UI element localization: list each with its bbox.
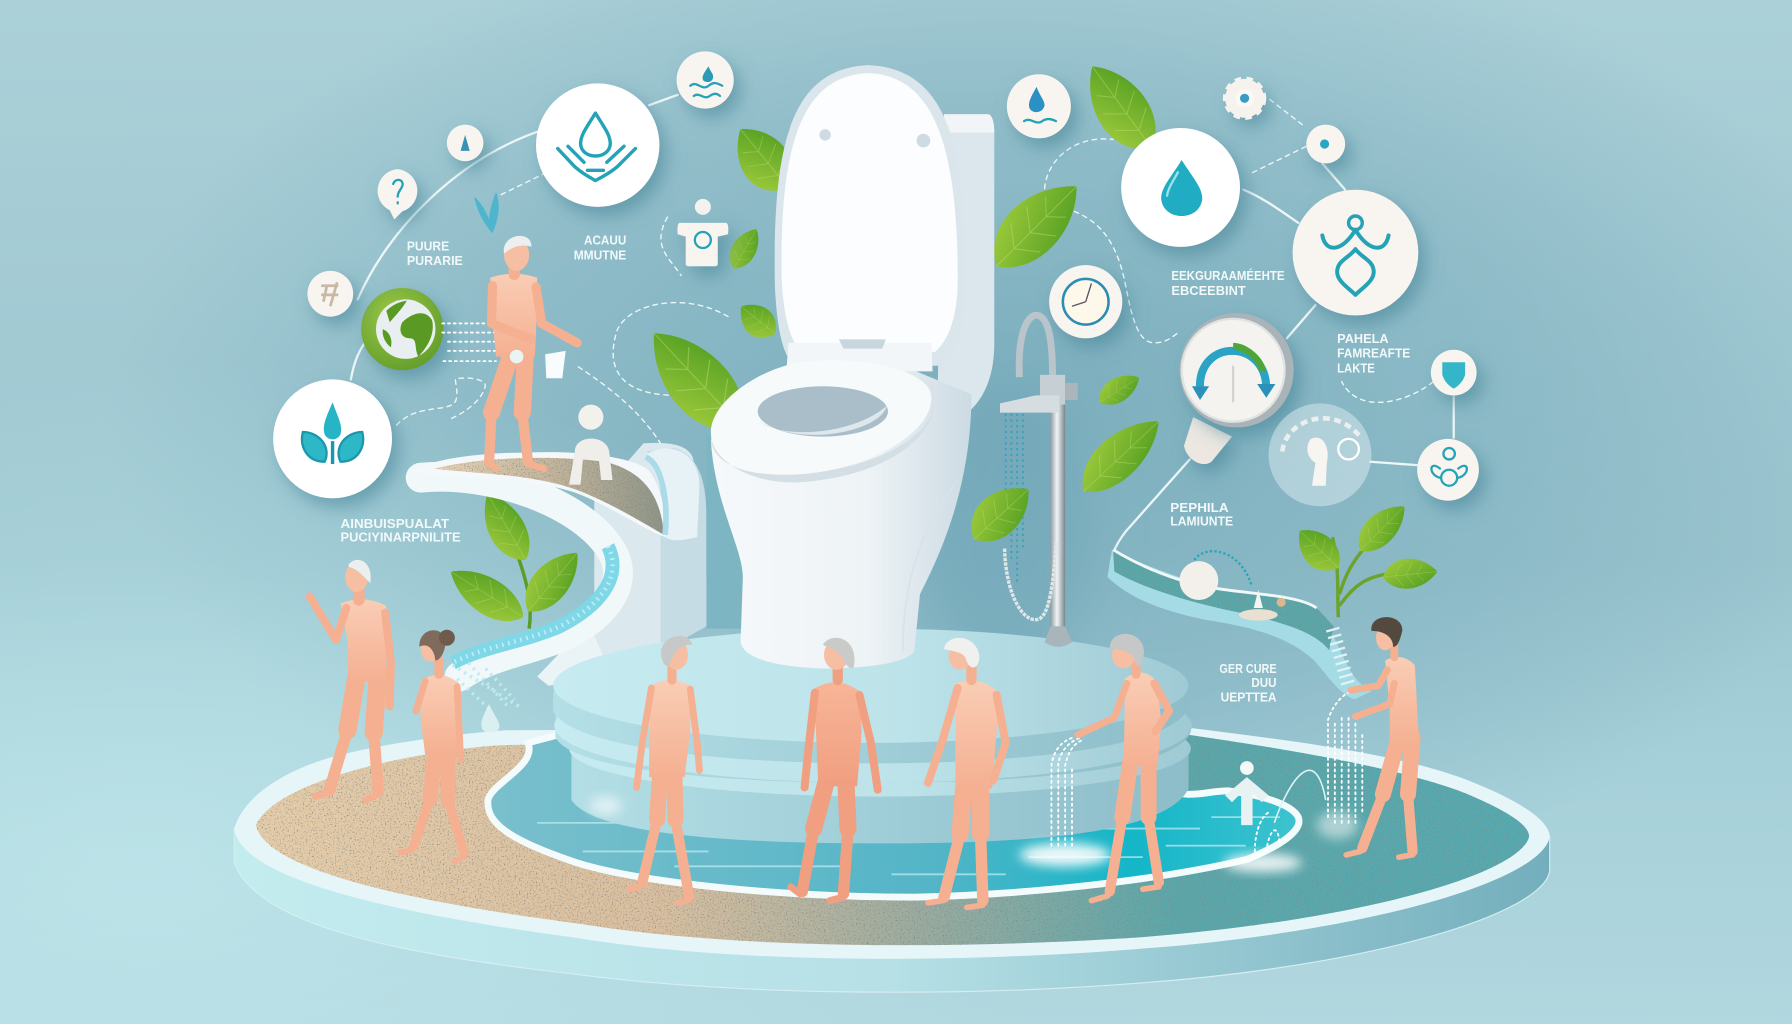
pool — [488, 731, 1299, 897]
icon: figure circle — [1293, 190, 1418, 315]
person: man at right — [1346, 617, 1419, 857]
leaves behind toilet — [631, 52, 1171, 450]
label: eekguraameehte — [1171, 268, 1285, 298]
label: pephila: LAMIUNTE — [1170, 515, 1233, 529]
platform base — [234, 829, 1550, 992]
label: pahela — [1337, 332, 1410, 376]
label: pephila — [1170, 501, 1233, 529]
icon: clock disc — [1049, 265, 1122, 338]
round stone — [1179, 561, 1218, 600]
seat hinge — [786, 343, 933, 371]
connector lines — [351, 95, 1454, 577]
seat — [711, 360, 931, 475]
icon: small person on gravel — [1225, 761, 1269, 825]
icon: water disc — [1007, 74, 1071, 138]
label: ainbuispualat: PUCIYINARPNILITE — [341, 531, 461, 545]
platform rim — [234, 727, 1550, 959]
leaf over shower — [959, 473, 1042, 554]
dotted stream from globe — [442, 323, 496, 361]
right plant — [1288, 495, 1439, 617]
label: acauu mmutne — [574, 234, 626, 262]
icon: question pin — [378, 169, 417, 219]
lid — [775, 65, 966, 366]
person: man looking down — [928, 638, 1006, 907]
dish — [1239, 609, 1278, 621]
left plant — [441, 485, 590, 633]
label: ainbuispualat — [341, 517, 461, 545]
icon: large water hands circle — [536, 83, 659, 207]
bowl — [711, 366, 971, 669]
icon: small node disc — [1306, 125, 1345, 163]
icon: plate number — [307, 271, 353, 317]
person: waving man — [310, 560, 391, 800]
icon: gauge — [1179, 313, 1294, 464]
icon: circle plant drop — [273, 379, 392, 498]
icon: blue wing — [474, 192, 499, 233]
person: man back view — [791, 638, 878, 901]
toilet — [711, 65, 994, 669]
label: ainbuispualat: AINBUISPUALAT — [341, 517, 449, 531]
person: woman with bun — [400, 630, 465, 862]
right slide — [1107, 550, 1371, 699]
icon: water droplet by sand — [481, 704, 499, 733]
tank — [937, 114, 994, 411]
label: pahela: PAHELA — [1337, 332, 1389, 346]
seated figure on ledge — [569, 405, 613, 485]
person: walking woman — [629, 636, 699, 903]
steps — [553, 629, 1192, 843]
icon: glass bubble — [1269, 403, 1371, 506]
icon: big water drop — [1121, 128, 1240, 247]
label: ger cure — [1219, 662, 1277, 705]
label: eekguraameehte: EBCEEBINT — [1171, 284, 1246, 298]
icon: bee disc — [1417, 439, 1479, 501]
leaves right — [976, 166, 1172, 506]
label: eekguraameehte: EEKGURAAMÉEHTE — [1171, 268, 1285, 283]
icon: gear — [1225, 79, 1264, 118]
gravel path — [256, 734, 1529, 945]
icon: small waves disc — [677, 51, 734, 109]
label: acauu mmutne: MMUTNE — [574, 248, 626, 262]
label: pahela: FAMREAFTE — [1337, 347, 1410, 361]
icon: small star disc — [447, 125, 483, 161]
icon: shield disc — [1431, 350, 1477, 395]
label: puure purarie — [407, 239, 463, 268]
faucet — [1000, 315, 1078, 647]
label: pephila: PEPHILA — [1170, 501, 1229, 515]
label: acauu mmutne: ACAUU — [584, 234, 626, 248]
label: puure purarie: PUURE — [407, 239, 449, 253]
person: woman with water — [1078, 634, 1169, 901]
label: puure purarie: PURARIE — [407, 254, 463, 268]
splash from slide — [453, 663, 519, 711]
icon: globe — [361, 288, 443, 370]
wall behind toilet — [537, 389, 1091, 686]
label: ger cure: DUU — [1251, 676, 1277, 690]
label: ger cure: GER CURE — [1219, 662, 1277, 676]
label: ger cure: UEPTTEA — [1221, 691, 1277, 705]
right icons — [1007, 74, 1479, 506]
icon: t-shirt tag — [677, 199, 728, 266]
person: towel man on ledge — [489, 236, 577, 469]
water curtains — [590, 693, 1362, 872]
label: pahela: LAKTE — [1337, 362, 1375, 376]
S-curve slide left — [414, 448, 699, 677]
